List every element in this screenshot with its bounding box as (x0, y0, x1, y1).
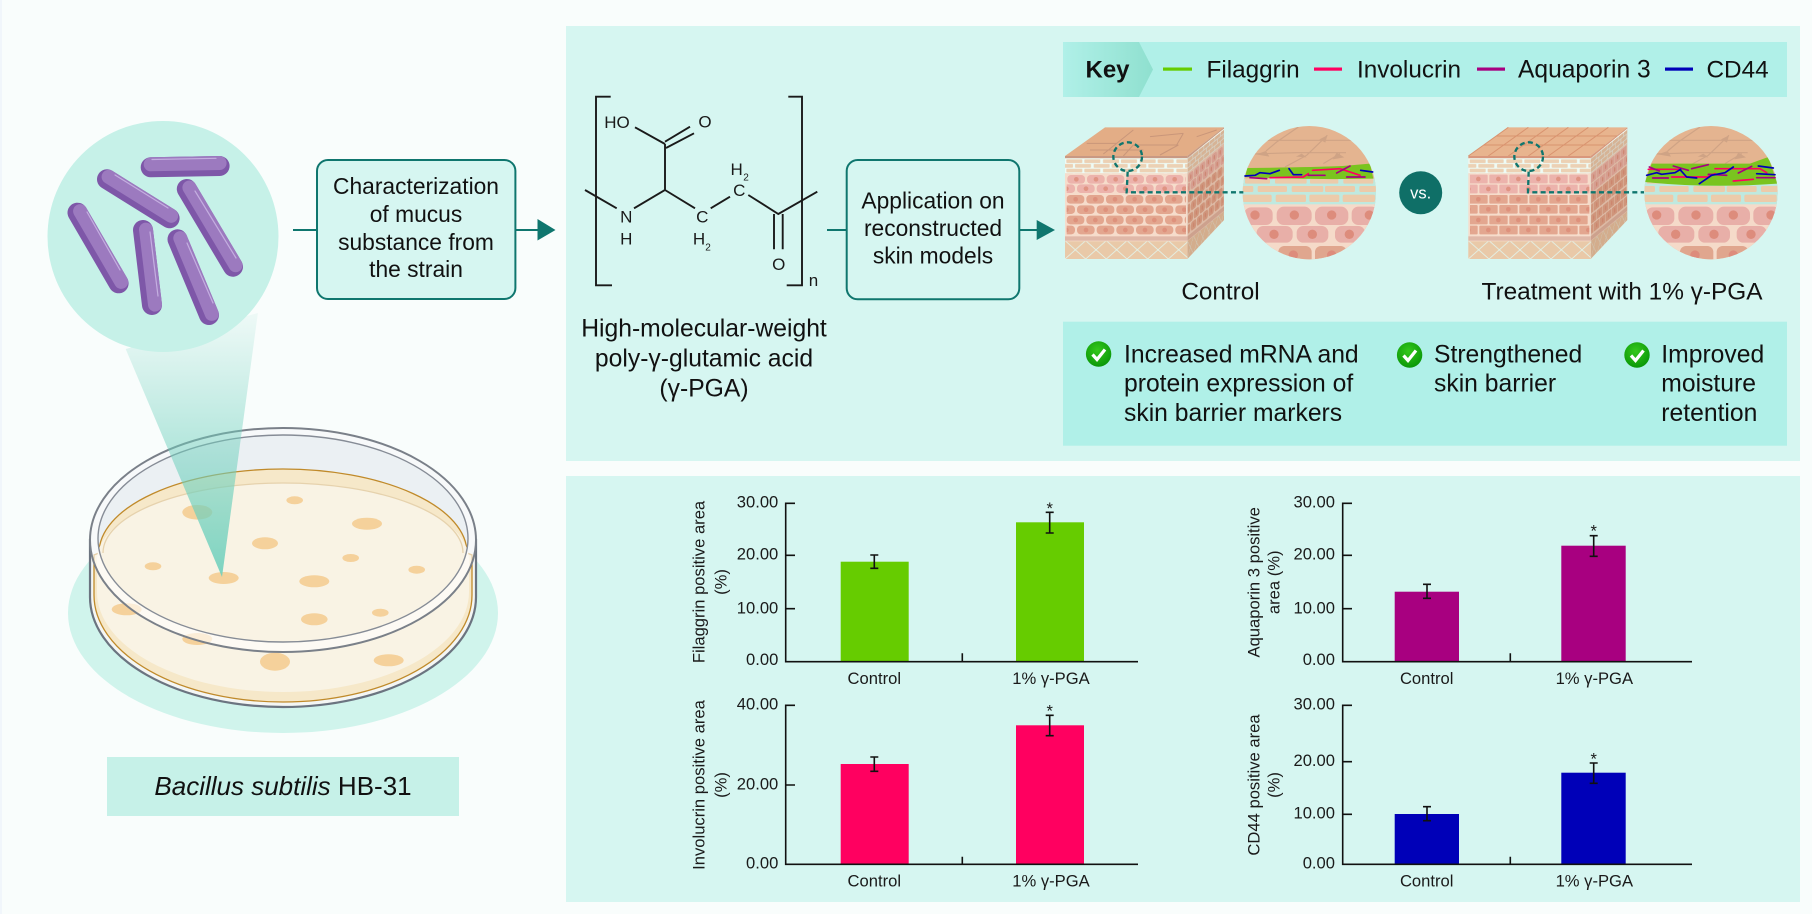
bar chart: Filaggrin: Filaggrin positive area (689, 500, 708, 663)
bar chart: CD44: 0.00 (1303, 853, 1335, 872)
bar chart: Filaggrin: 1% γ-PGA (1012, 669, 1091, 688)
key: Aquaporin 3 (1518, 56, 1651, 84)
characterization box: substance from (338, 229, 494, 255)
icon: check 2 (1397, 342, 1422, 368)
chemical structure: gamma-PGA: 2 (705, 243, 711, 254)
arrow: dish to characterization (293, 229, 317, 231)
bar chart: Filaggrin: * (1046, 499, 1053, 518)
skin model: control (1057, 123, 1379, 264)
bar chart: Aquaporin 3: 30.00 (1293, 492, 1335, 511)
skin cube: control (1057, 125, 1229, 261)
strain label (107, 757, 459, 816)
bar chart: CD44: 10.00 (1293, 804, 1335, 823)
panel: outcomes (1063, 322, 1787, 446)
bacterial colonies (112, 496, 425, 671)
magnification beam (126, 313, 258, 577)
chemical structure: gamma-PGA: N (620, 208, 632, 227)
icon: check 1 (1086, 341, 1111, 367)
key: CD44 (1706, 56, 1769, 84)
outcome: expression: Increased mRNA and (1124, 341, 1359, 368)
outcome: barrier (1434, 341, 1582, 398)
bar chart: Aquaporin 3: Aquaporin 3 positive (1244, 507, 1263, 657)
chemical structure: gamma-PGA: H (731, 160, 743, 179)
bar chart: Filaggrin: Control (848, 669, 901, 688)
chemical structure: gamma-PGA: O (698, 112, 712, 132)
compound name: poly-γ-glutamic acid (595, 346, 813, 373)
bar chart: Aquaporin 3: 20.00 (1293, 544, 1335, 563)
vs badge: vs. (1410, 184, 1431, 202)
chemical structure: gamma-PGA: C (733, 181, 745, 200)
bar chart: CD44: CD44 positive area (1244, 714, 1263, 856)
characterization box: the strain (369, 256, 463, 282)
petri dish base shadow (68, 493, 498, 733)
bar chart: Aquaporin 3 (1244, 492, 1692, 688)
petri dish (90, 428, 476, 707)
zoomed skin section: treatment (1641, 123, 1781, 264)
chemical structure: gamma-PGA: 2 (743, 173, 749, 184)
zoom callout: control (1113, 142, 1243, 192)
outcome: moisture: Improved (1661, 341, 1764, 368)
key (1063, 42, 1787, 97)
bar chart: CD44: 20.00 (1293, 751, 1335, 770)
skin cube: treatment (1459, 124, 1632, 261)
icon: check 3 (1624, 342, 1650, 368)
bar chart: Filaggrin: 0.00 (746, 650, 778, 669)
bar chart: Filaggrin: 20.00 (737, 544, 778, 563)
arrow: application to skin models (1019, 220, 1055, 240)
zoomed skin section: control (1242, 126, 1376, 260)
outcome: expression (1124, 341, 1359, 427)
bar chart: Aquaporin 3: 10.00 (1293, 598, 1335, 617)
outcome: moisture: moisture (1661, 371, 1756, 398)
application box (847, 160, 1019, 299)
bar chart: CD44: Control (1400, 872, 1453, 891)
chemical structure: gamma-PGA: O (772, 255, 785, 274)
outcome: moisture (1661, 341, 1764, 427)
bar chart: Filaggrin: 30.00 (737, 492, 778, 511)
bar chart: Involucrin (689, 694, 1138, 891)
chemical structure: gamma-PGA: H (620, 229, 632, 248)
key: Key (1086, 56, 1130, 84)
characterization box: Characterization (333, 173, 499, 199)
arrow: characterization to structure (515, 219, 556, 240)
vs badge (1399, 171, 1442, 214)
panel: top workflow (566, 26, 1800, 461)
compound name: (γ-PGA) (659, 376, 749, 403)
bar chart: Involucrin: 20.00 (737, 774, 778, 793)
application box: reconstructed (864, 215, 1002, 241)
skin model: treatment (1459, 123, 1781, 264)
bar chart: Aquaporin 3: Control (1400, 669, 1453, 688)
bar chart: Filaggrin (689, 492, 1138, 688)
bar chart: Involucrin: * (1046, 702, 1053, 721)
bar chart: Filaggrin: (%) (712, 569, 731, 595)
bar chart: Aquaporin 3: * (1590, 521, 1597, 540)
panel: bar charts (566, 476, 1800, 902)
compound name (581, 316, 827, 403)
bar chart: Involucrin: Control (848, 872, 901, 891)
key: Involucrin (1357, 56, 1461, 84)
characterization box: of mucus (370, 201, 462, 227)
bar chart: CD44 (1244, 694, 1692, 891)
bar chart: Involucrin: 40.00 (737, 694, 778, 713)
key: Filaggrin (1206, 56, 1300, 84)
outcome: expression: skin barrier markers (1124, 400, 1342, 427)
bar chart: CD44: (%) (1264, 772, 1283, 798)
bar chart: Involucrin: 0.00 (746, 853, 778, 872)
bar chart: CD44: 30.00 (1293, 694, 1335, 713)
strain label: Bacillus subtilis HB-31 (154, 771, 412, 801)
bar chart: Aquaporin 3: 0.00 (1303, 650, 1335, 669)
marker lines: treatment (1647, 165, 1775, 184)
outcome: barrier: Strengthened (1434, 341, 1582, 368)
bar chart: Aquaporin 3: area (%) (1264, 550, 1283, 614)
marker lines: control (1245, 166, 1373, 179)
zoom callout: treatment (1514, 142, 1644, 192)
application box: skin models (873, 242, 993, 268)
application box: Application on (861, 187, 1005, 213)
bar chart: CD44: 1% γ-PGA (1556, 872, 1634, 891)
chemical structure: gamma-PGA: C (696, 208, 708, 227)
chemical structure: gamma-PGA: HO (604, 113, 630, 132)
arrow: structure to application (827, 229, 847, 231)
chemical structure: gamma-PGA (585, 97, 818, 290)
compound name: High-molecular-weight (581, 316, 827, 343)
bar chart: Filaggrin: 10.00 (737, 598, 778, 617)
caption: control: Control (1181, 278, 1260, 305)
outcome: moisture: retention (1661, 400, 1757, 427)
chemical structure: gamma-PGA: H (693, 229, 705, 248)
outcome: barrier: skin barrier (1434, 371, 1556, 398)
caption: treatment: Treatment with 1% γ-PGA (1481, 278, 1763, 305)
bar chart: Involucrin: Involucrin positive area (689, 699, 708, 870)
bar chart: Aquaporin 3: 1% γ-PGA (1556, 669, 1634, 688)
bar chart: Involucrin: 1% γ-PGA (1012, 872, 1091, 891)
bar chart: CD44: * (1590, 750, 1597, 769)
icon: magnified bacteria (48, 121, 278, 352)
chemical structure: gamma-PGA: n (809, 271, 818, 290)
outcome: expression: protein expression of (1124, 371, 1353, 398)
bar chart: Involucrin: (%) (712, 772, 731, 798)
characterization box (317, 160, 515, 299)
